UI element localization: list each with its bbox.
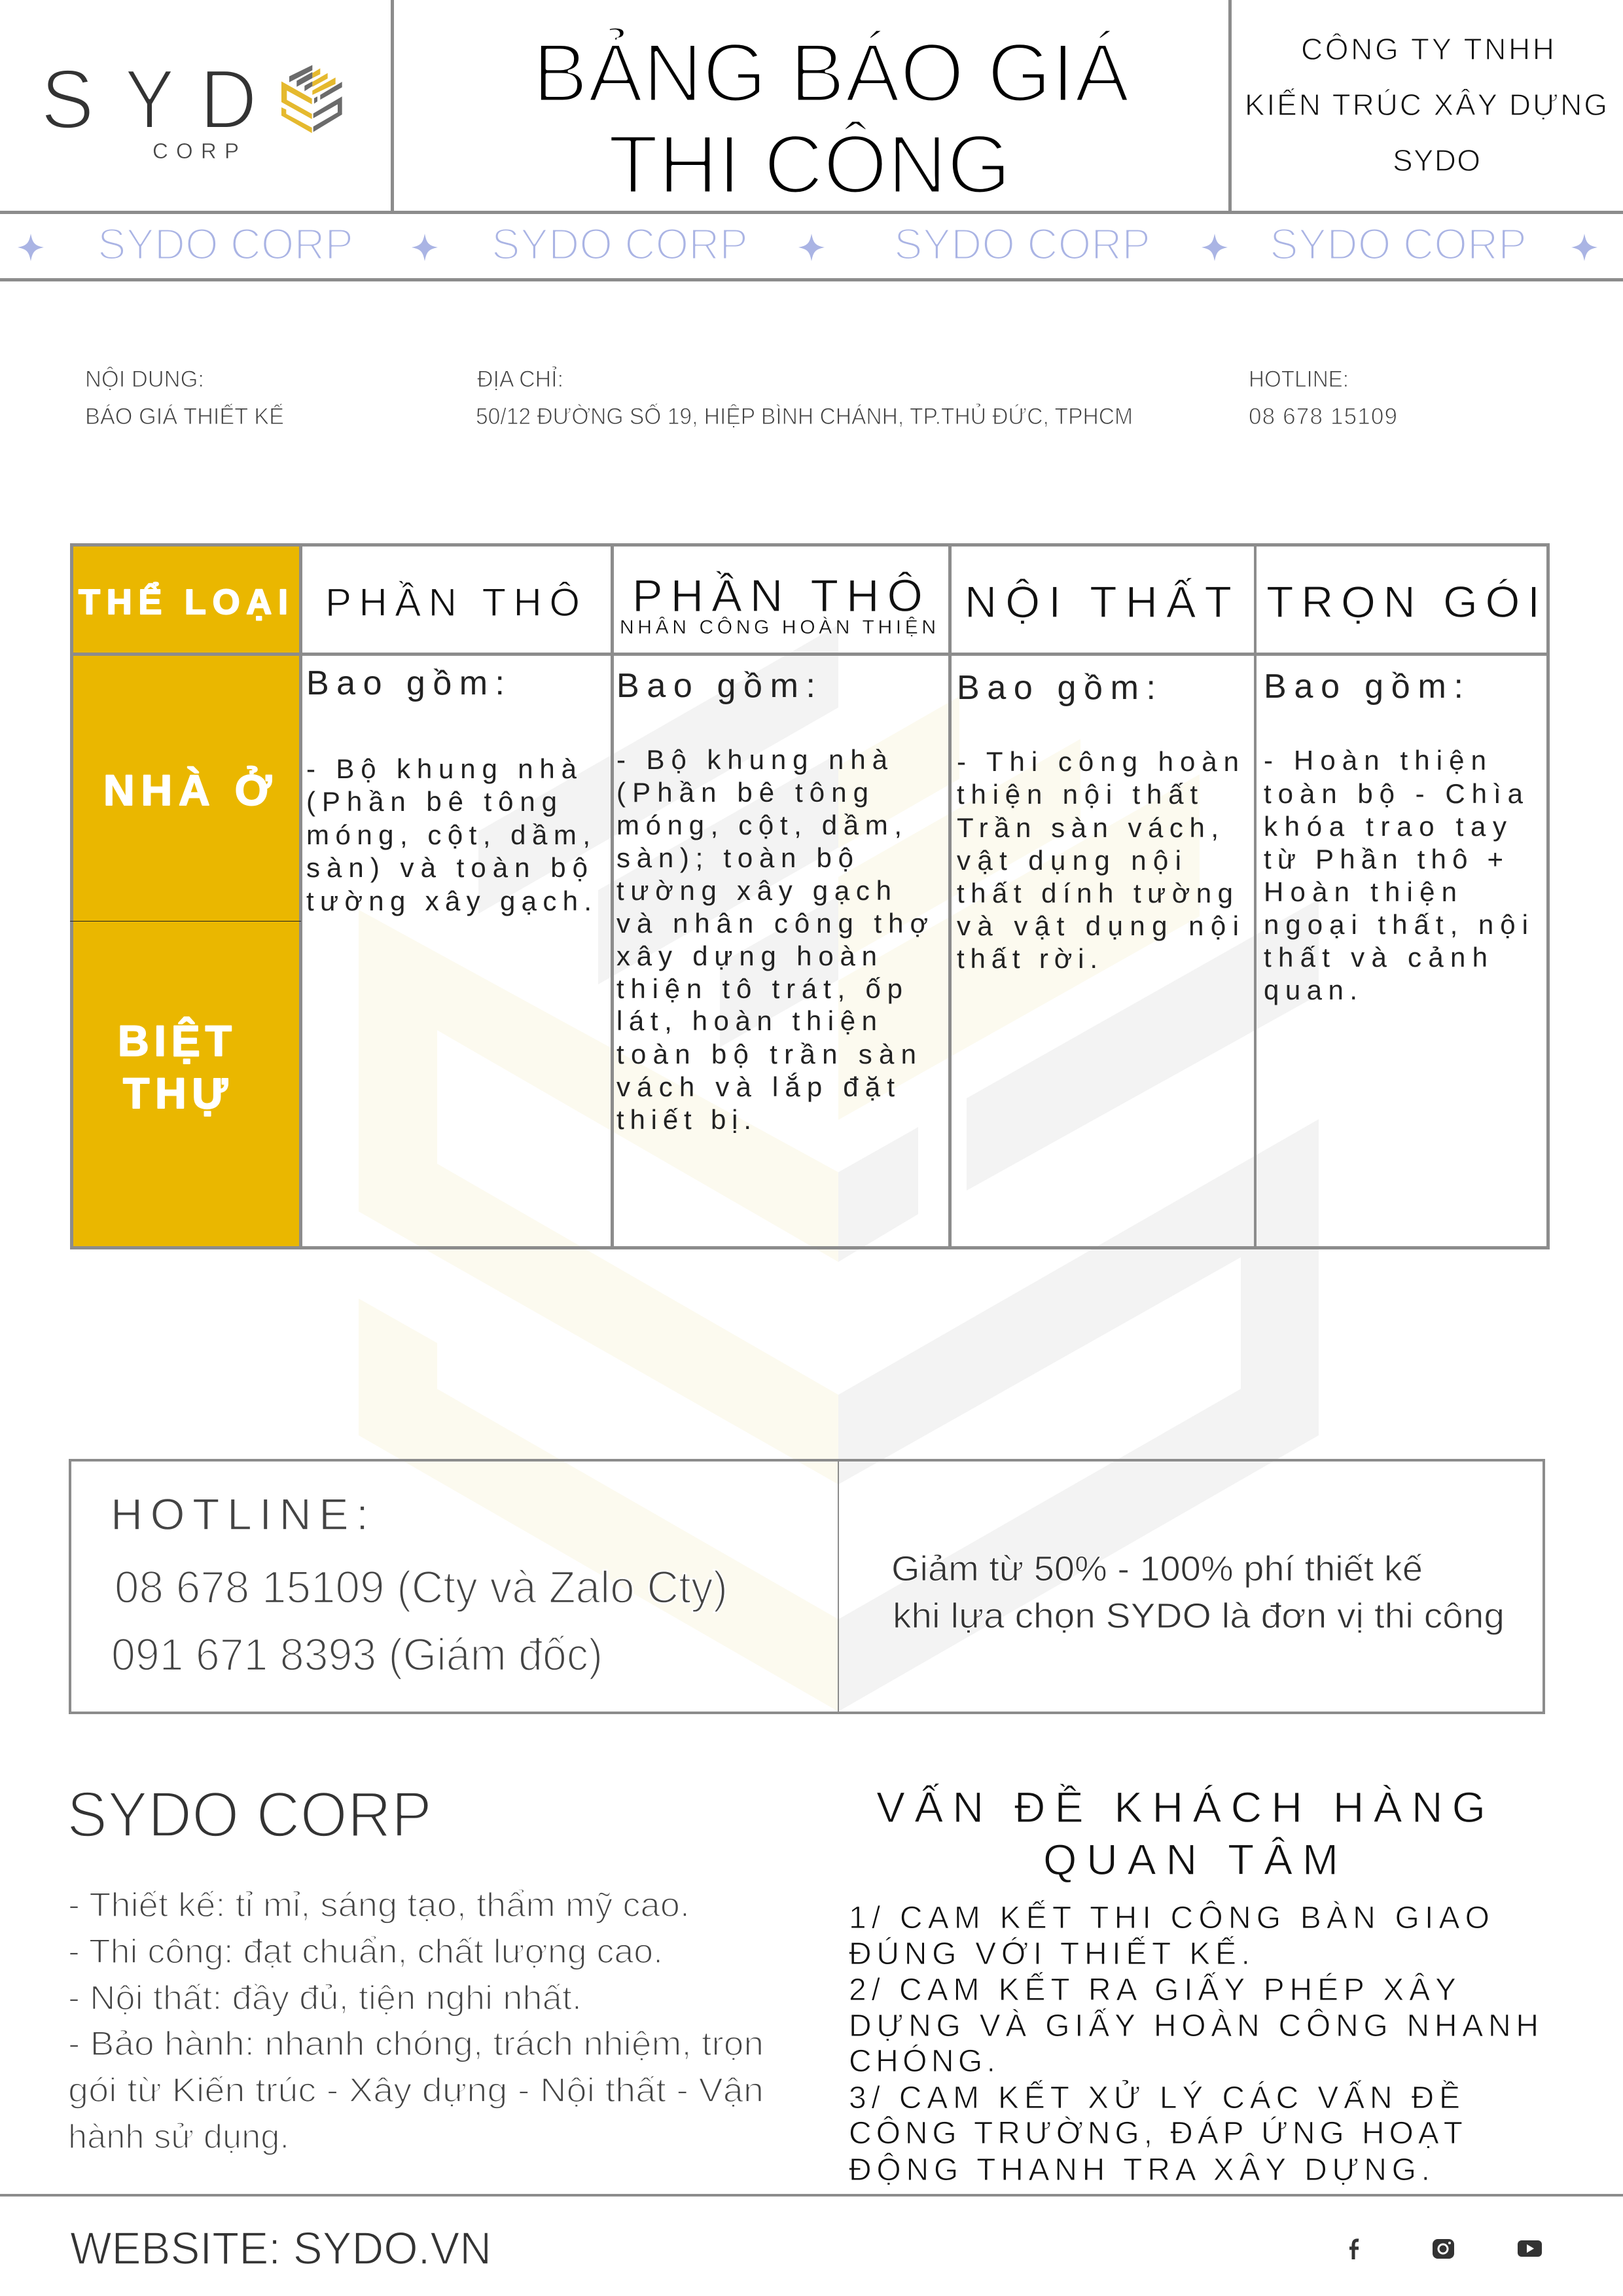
- hotline block: 08 678 15109 (Cty và Zalo Cty): [115, 1562, 728, 1613]
- footer rule: [0, 2194, 1623, 2197]
- hotline: 08 678 15109: [1249, 404, 1397, 429]
- column 3: noi that: Trần sàn vách,: [957, 812, 1219, 843]
- category labels: BIỆT: [118, 1016, 232, 1065]
- company name: KIẾN TRÚC XÂY DỰNG: [1245, 88, 1607, 122]
- column 2: phan tho nhan cong hoan thien: Bao gồm:: [616, 667, 815, 705]
- commitments list: 3/ CAM KẾT XỬ LÝ CÁC VẤN ĐỀ: [849, 2079, 1460, 2115]
- strengths list: - Thiết kế: tỉ mỉ, sáng tạo, thẩm mỹ cao.: [68, 1886, 690, 1924]
- ribbon labels: SYDO CORP: [894, 220, 1150, 269]
- hotline block: [111, 1490, 728, 1680]
- address: 50/12 ĐƯỜNG SỐ 19, HIỆP BÌNH CHÁNH, TP.THỦ ĐỨC, TPHCM: [476, 403, 1133, 429]
- column 4: tron goi: từ Phần thô +: [1264, 844, 1503, 874]
- column 2: phan tho nhan cong hoan thien: và nhân công thợ: [616, 908, 928, 939]
- column 2: phan tho nhan cong hoan thien: - Bộ khung nhà: [616, 744, 888, 775]
- commitments list: 1/ CAM KẾT THI CÔNG BÀN GIAO: [849, 1900, 1489, 1935]
- commitments list: ĐÚNG VỚI THIẾT KẾ.: [849, 1936, 1250, 1971]
- icon: instagram: [1433, 2239, 1454, 2259]
- heading: [876, 1783, 1486, 1884]
- title: BẢNG BÁO GIÁ: [533, 26, 1130, 119]
- column 1: phan tho: [306, 664, 592, 916]
- logo wordmark: D: [200, 52, 257, 147]
- background watermark logo: [359, 625, 1319, 1712]
- hotline: [1249, 367, 1397, 429]
- column 1: phan tho: Bao gồm:: [306, 664, 505, 702]
- table grid lines: [70, 543, 1550, 1249]
- icon: youtube: [1518, 2240, 1542, 2257]
- contact and discount panel: [70, 1460, 1544, 1713]
- column 3: noi that: [957, 669, 1239, 974]
- header panel: [0, 0, 1623, 281]
- ribbon stars: [18, 234, 1597, 261]
- content label: BÁO GIÁ THIẾT KẾ: [85, 403, 284, 429]
- column 4: tron goi: [1264, 668, 1528, 1005]
- column 3: noi that: - Thi công hoàn: [957, 746, 1239, 777]
- company name: [1245, 32, 1607, 177]
- discount note: [891, 1549, 1505, 1636]
- ribbon labels: SYDO CORP: [98, 220, 353, 269]
- column 2: phan tho nhan cong hoan thien: sàn); toàn bộ: [616, 842, 853, 873]
- project info row: [85, 366, 1397, 429]
- column 4: tron goi: khóa trao tay: [1264, 811, 1507, 842]
- commitments list: ĐỘNG THANH TRA XÂY DỰNG.: [849, 2152, 1430, 2187]
- content label: NỘI DUNG:: [85, 366, 204, 392]
- logo wordmark: [41, 52, 257, 147]
- column headings: [325, 570, 1540, 638]
- column 2: phan tho nhan cong hoan thien: (Phần bê tông: [616, 777, 868, 808]
- commitments list: 2/ CAM KẾT RA GIẤY PHÉP XÂY: [849, 1972, 1456, 2007]
- column 2: phan tho nhan cong hoan thien: xây dựng hoàn: [616, 941, 877, 971]
- strengths list: gói từ Kiến trúc - Xây dựng - Nội thất - Vận: [68, 2072, 764, 2109]
- commitments list: [849, 1900, 1539, 2187]
- panel: customer concerns: [849, 1783, 1539, 2187]
- column 2: phan tho nhan cong hoan thien: vách và lắp đặt: [616, 1071, 895, 1102]
- commitments list: CÔNG TRƯỜNG, ĐÁP ỨNG HOẠT: [849, 2115, 1463, 2151]
- logo wordmark: Y: [124, 52, 175, 147]
- strengths list: hành sử dụng.: [68, 2118, 289, 2156]
- column 1: phan tho: sàn) và toàn bộ: [306, 852, 588, 883]
- address: [476, 366, 1133, 429]
- strengths list: - Thi công: đạt chuẩn, chất lượng cao.: [68, 1933, 663, 1971]
- pricing table: [70, 543, 1550, 1249]
- column 3: noi that: thiện nội thất: [957, 779, 1198, 810]
- company logo: [41, 52, 342, 163]
- panel: sydo corp strengths: [67, 1778, 764, 2156]
- ribbon labels: SYDO CORP: [491, 220, 748, 269]
- column headings: PHẦN THÔ: [632, 570, 923, 621]
- column 1: phan tho: (Phần bê tông: [306, 786, 557, 817]
- column 3: noi that: thất rời.: [957, 943, 1097, 974]
- title: THI CÔNG: [608, 118, 1011, 211]
- logo cube icon: [281, 65, 342, 133]
- column 4: tron goi: Bao gồm:: [1264, 668, 1463, 706]
- column 2: phan tho nhan cong hoan thien: lát, hoàn thiện: [616, 1005, 877, 1036]
- column 4: tron goi: quan.: [1264, 975, 1357, 1005]
- column 4: tron goi: thất và cảnh: [1264, 942, 1488, 973]
- column 3: noi that: thất dính tường: [957, 878, 1233, 908]
- column 2: phan tho nhan cong hoan thien: [616, 667, 928, 1135]
- column headings: PHẦN THÔ: [325, 581, 580, 624]
- heading: SYDO CORP: [67, 1778, 432, 1850]
- logo wordmark: S: [41, 52, 94, 147]
- panel frame: [70, 1460, 1544, 1713]
- strengths list: - Nội thất: đầy đủ, tiện nghi nhất.: [68, 1979, 582, 2017]
- ribbon labels: [98, 220, 1527, 269]
- column 3: noi that: và vật dụng nội: [957, 910, 1239, 941]
- brand ribbon: [18, 220, 1597, 269]
- category labels: THỂ LOẠI: [79, 583, 288, 622]
- column 3: noi that: Bao gồm:: [957, 669, 1156, 707]
- column 4: tron goi: ngoại thất, nội: [1264, 909, 1528, 940]
- column 4: tron goi: toàn bộ - Chìa: [1264, 778, 1524, 809]
- heading: VẤN ĐỀ KHÁCH HÀNG: [876, 1783, 1486, 1831]
- hotline block: HOTLINE:: [111, 1490, 368, 1539]
- column 1: phan tho: tường xây gạch.: [306, 886, 592, 916]
- hotline block: 091 671 8393 (Giám đốc): [111, 1629, 603, 1680]
- content label: [85, 366, 284, 429]
- icon: facebook: [1349, 2240, 1359, 2259]
- footer: [0, 2194, 1623, 2274]
- discount note: khi lựa chọn SYDO là đơn vị thi công: [893, 1596, 1505, 1636]
- column headings: NỘI THẤT: [965, 577, 1232, 627]
- column 2: phan tho nhan cong hoan thien: thiết bị.: [616, 1104, 751, 1135]
- company name: SYDO: [1393, 143, 1480, 177]
- address: ĐỊA CHỈ:: [477, 366, 563, 392]
- category labels: NHÀ Ở: [103, 766, 272, 814]
- header frame lines: [0, 0, 1623, 281]
- ribbon labels: SYDO CORP: [1270, 220, 1527, 269]
- column headings: TRỌN GÓI: [1266, 577, 1540, 627]
- commitments list: CHÓNG.: [849, 2043, 995, 2079]
- title: [533, 26, 1130, 211]
- column 3: noi that: vật dụng nội: [957, 845, 1181, 876]
- column 4: tron goi: - Hoàn thiện: [1264, 745, 1486, 776]
- column 4: tron goi: Hoàn thiện: [1264, 876, 1457, 907]
- column 2: phan tho nhan cong hoan thien: thiện tô trát, ốp: [616, 973, 902, 1004]
- category labels: [79, 583, 288, 1117]
- strengths list: [68, 1886, 764, 2156]
- company name: CÔNG TY TNHH: [1301, 32, 1554, 66]
- column 1: phan tho: móng, cột, dầm,: [306, 819, 590, 850]
- column 2: phan tho nhan cong hoan thien: toàn bộ trần sàn: [616, 1039, 916, 1069]
- hotline: HOTLINE:: [1249, 367, 1349, 392]
- gold category column: [72, 545, 300, 1248]
- heading: QUAN TÂM: [1043, 1835, 1338, 1884]
- website: WEBSITE: SYDO.VN: [70, 2223, 491, 2274]
- column 2: phan tho nhan cong hoan thien: tường xây gạch: [616, 875, 891, 906]
- commitments list: DỰNG VÀ GIẤY HOÀN CÔNG NHANH: [849, 2008, 1539, 2043]
- discount note: Giảm từ 50% - 100% phí thiết kế: [891, 1549, 1423, 1588]
- strengths list: - Bảo hành: nhanh chóng, trách nhiệm, trọn: [68, 2025, 764, 2063]
- column 1: phan tho: - Bộ khung nhà: [306, 753, 577, 784]
- column headings: NHÂN CÔNG HOÀN THIỆN: [620, 616, 936, 638]
- category labels: THỰ: [123, 1069, 228, 1117]
- column 2: phan tho nhan cong hoan thien: móng, cột, dầm,: [616, 810, 902, 840]
- logo subtitle: CORP: [152, 139, 239, 163]
